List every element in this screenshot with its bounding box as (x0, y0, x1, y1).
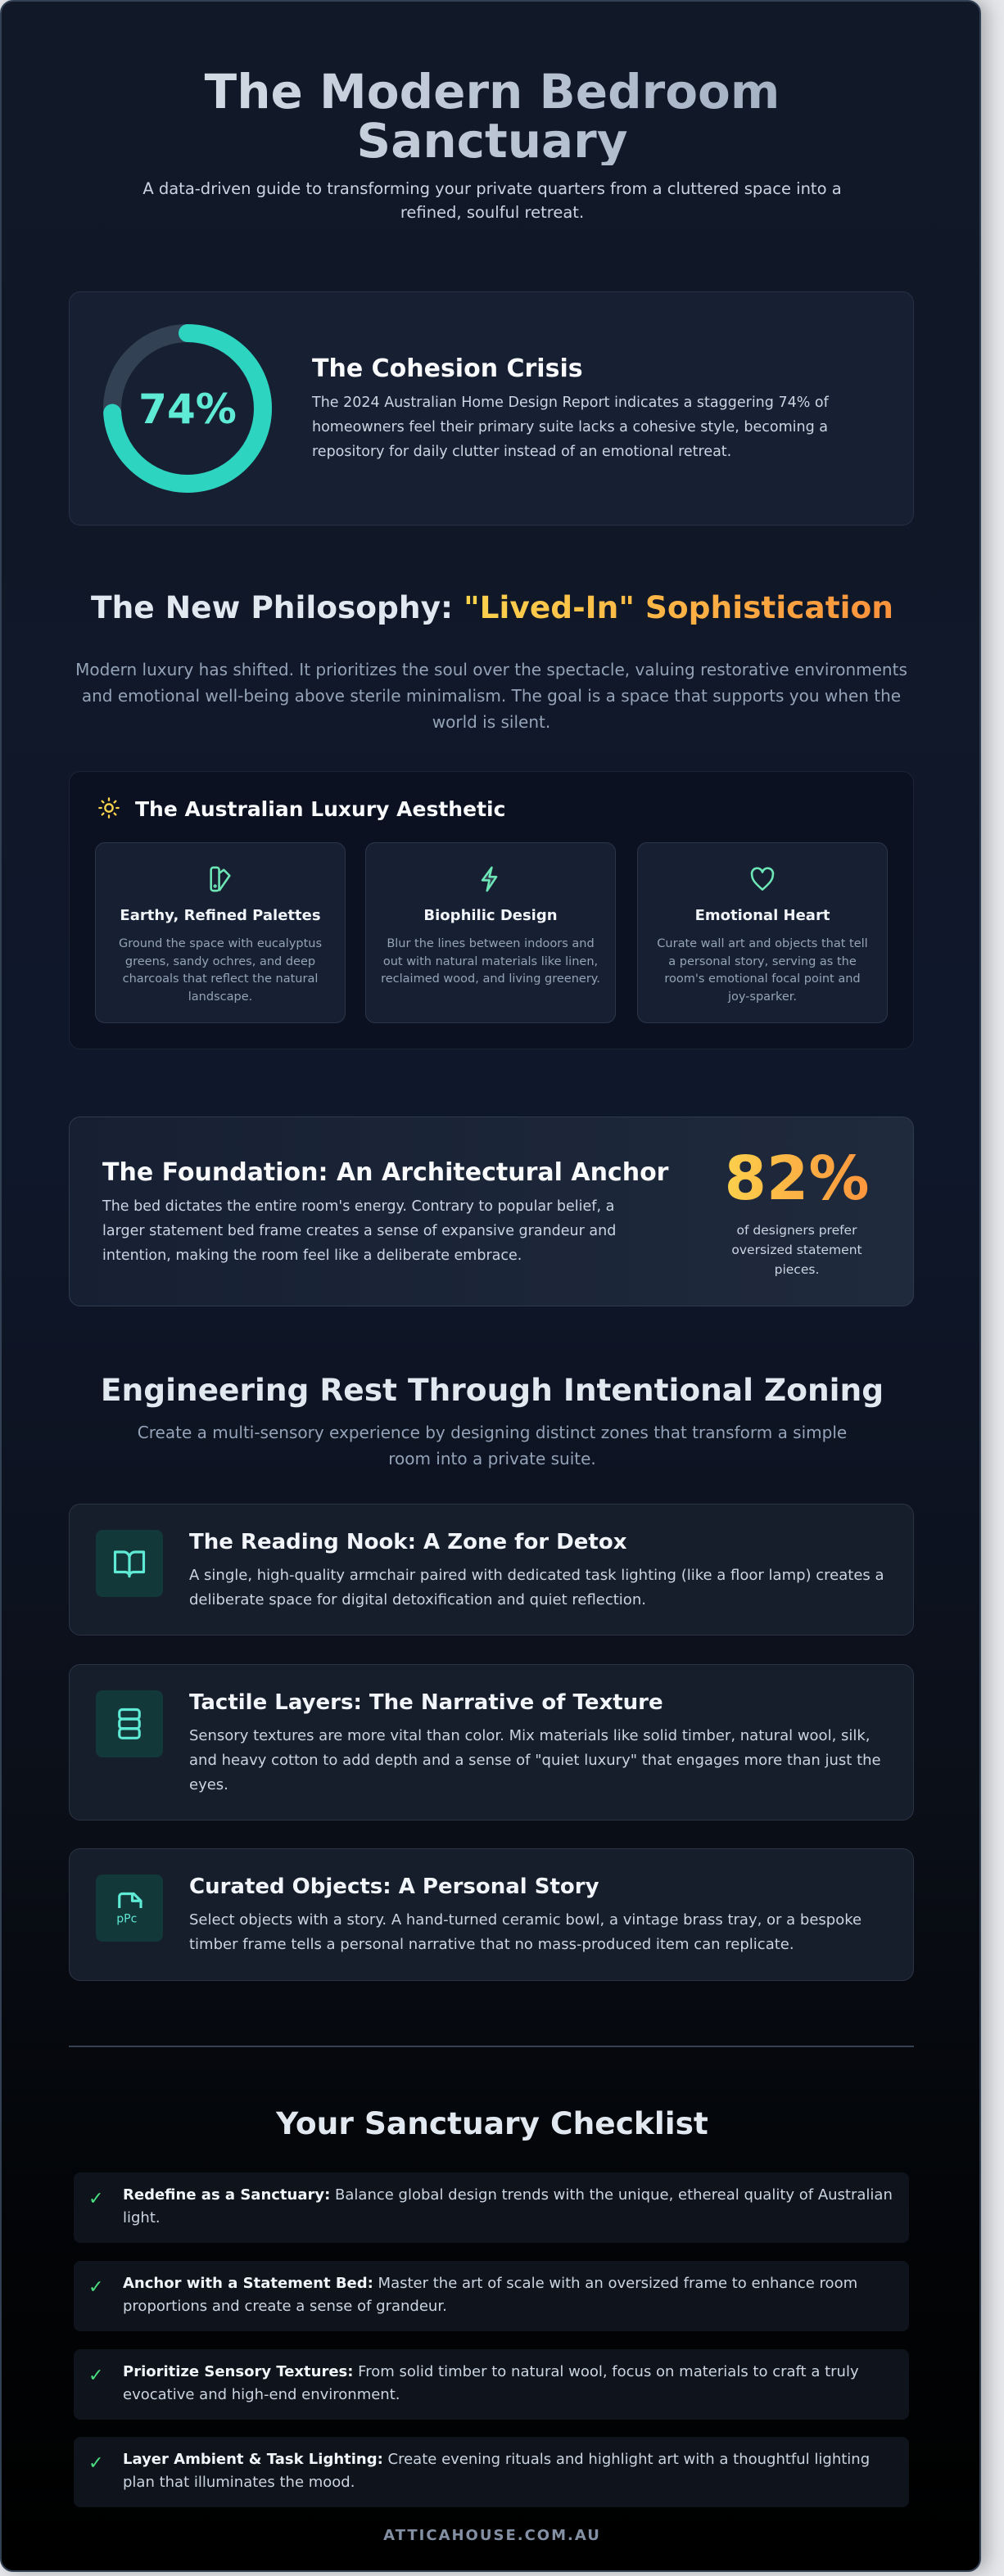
icon: file (96, 1874, 163, 1942)
icon: heart (750, 867, 775, 891)
stat: 82%: of designers prefer oversized statement pieces. (731, 1223, 862, 1277)
stat: 82%: 82% (724, 1144, 870, 1214)
zone card: tactile layers: Tactile Layers: The Narrative of Texture (189, 1690, 663, 1715)
card: earthy palettes (95, 842, 346, 1023)
heading: The Foundation: An Architectural Anchor (102, 1158, 668, 1187)
card: biophilic design: Blur the lines between indoors and out with natural materials like linen, reclaimed wood, and living greenery. (381, 937, 600, 986)
heading: zoning: Engineering Rest Through Intentional Zoning (101, 1372, 884, 1408)
title: Sanctuary (356, 113, 628, 169)
icon: book (96, 1530, 163, 1597)
title: The Modern Bedroom (205, 64, 780, 120)
checklist item 1 (74, 2172, 909, 2243)
checklist item 1: Redefine as a Sanctuary: Balance global design trends with the unique, ethereal quality of Australian light. (123, 2186, 893, 2226)
philosophy paragraph: Modern luxury has shifted. It prioritizes the soul over the spectacle, valuing restorative environments and emotional well-being above sterile minimalism. The goal is a space that supports you when the world is silent. (75, 660, 907, 732)
checklist item 4: ✓ (88, 2453, 103, 2474)
checklist item 3: Prioritize Sensory Textures: From solid timber to natural wool, focus on materials to craft a truly evocative and high-end environment. (123, 2363, 859, 2403)
icon: bolt (482, 866, 498, 892)
card: biophilic design: Biophilic Design (423, 907, 558, 924)
card: earthy palettes: Ground the space with eucalyptus greens, sandy ochres, and deep charcoals that reflect the natural landscape. (119, 937, 322, 1004)
zone card: reading nook (69, 1504, 914, 1635)
checklist item 2: ✓ (88, 2277, 103, 2298)
icon: swatch (210, 866, 231, 892)
zone card: curated objects: Curated Objects: A Personal Story (189, 1874, 599, 1899)
title (205, 64, 780, 169)
card: emotional heart: Curate wall art and objects that tell a personal story, serving as the room's emotional focal point and joy-sparker. (657, 937, 868, 1004)
zone card: reading nook: A single, high-quality armchair paired with dedicated task lighting (like a floor lamp) creates a deliberate space for digital detoxification and quiet reflection. (189, 1567, 884, 1608)
panel: cohesion crisis (69, 291, 914, 526)
zone card: curated objects: Select objects with a story. A hand-turned ceramic bowl, a vintage brass tray, or a bespoke timber frame tells a personal narrative that no mass-produced item can replicate. (189, 1911, 862, 1953)
icon: layers (96, 1690, 163, 1757)
zoning subtitle: Create a multi-sensory experience by designing distinct zones that transform a simple room into a private suite. (138, 1423, 847, 1468)
card: earthy palettes: Earthy, Refined Palettes (120, 907, 321, 924)
stat: 82% (724, 1144, 870, 1277)
checklist item 2 (74, 2261, 909, 2331)
zone card: reading nook: The Reading Nook: A Zone for Detox (189, 1530, 626, 1554)
panel heading: The Australian Luxury Aesthetic (135, 797, 505, 821)
heading: The Cohesion Crisis (312, 354, 583, 383)
checklist item 4: Layer Ambient & Task Lighting: Create evening rituals and highlight art with a thoughtful lighting plan that illuminates the mood. (123, 2451, 870, 2491)
subtitle: A data-driven guide to transforming your private quarters from a cluttered space into a refined, soulful retreat. (142, 179, 842, 222)
body text: The 2024 Australian Home Design Report indicates a staggering 74% of homeowners feel their primary suite lacks a cohesive style, becoming a repository for daily clutter instead of an emotional retreat. (312, 395, 829, 460)
checklist item 1: ✓ (88, 2189, 103, 2209)
zone card: tactile layers (69, 1664, 914, 1820)
icon: sun (98, 797, 120, 819)
zone card: tactile layers: Sensory textures are more vital than color. Mix materials like solid timber, natural wool, silk, and heavy cotton to add depth and a sense of "quiet luxury" that engages more than just the eyes. (189, 1727, 881, 1793)
checklist item 2: Anchor with a Statement Bed: Master the art of scale with an oversized frame to enhance room proportions and create a sense of grandeur. (123, 2275, 857, 2315)
panel: australian luxury aesthetic (69, 771, 914, 1049)
heading: new philosophy: The New Philosophy: "Lived-In" Sophistication (91, 589, 893, 625)
checklist item 3: ✓ (88, 2366, 103, 2386)
card: emotional heart (637, 842, 888, 1023)
card: emotional heart: Emotional Heart (695, 907, 830, 924)
checklist item 4 (74, 2437, 909, 2507)
footer: ATTICAHOUSE.COM.AU (383, 2527, 601, 2544)
donut chart 74% (103, 324, 272, 493)
card: biophilic design (365, 842, 616, 1023)
panel: foundation (69, 1117, 914, 1306)
zone card: curated objects (69, 1848, 914, 1981)
checklist item 3 (74, 2349, 909, 2420)
body text: The bed dictates the entire room's energy. Contrary to popular belief, a larger statement bed frame creates a sense of expansive grandeur and intention, making the room feel like a deliberate embrace. (102, 1198, 616, 1264)
heading: checklist: Your Sanctuary Checklist (276, 2105, 708, 2141)
donut chart 74%: 74% (138, 386, 237, 433)
